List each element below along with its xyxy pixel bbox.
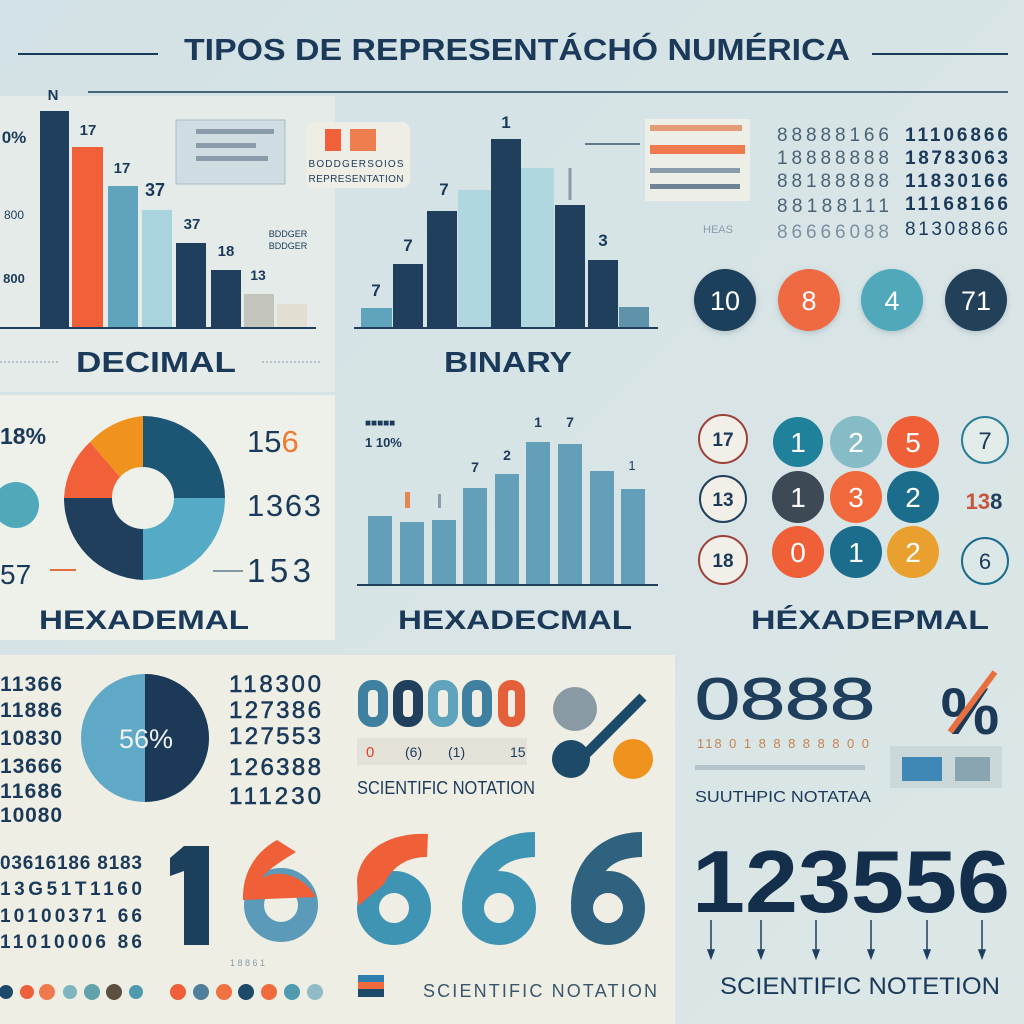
number circles: top right: 10 — [710, 286, 740, 316]
callout: decimal representation: BODDGERSOIOS — [308, 159, 404, 170]
number table: top right: 18783063 — [905, 148, 1008, 169]
bar chart: decimal: 800 — [3, 271, 25, 286]
number table: lower left: 1 8 8 6 1 — [230, 958, 265, 968]
number table: top right: 88188111 — [777, 196, 889, 217]
donut side numbers: 1363 — [247, 488, 321, 523]
number table: top right — [703, 125, 1008, 243]
bar chart: hexadecimal: ■■■■■ — [365, 418, 395, 429]
large number 1 — [170, 846, 209, 945]
outlined number circles: left column: 18 — [712, 551, 734, 572]
bar chart: binary: 7 — [403, 236, 413, 255]
number circle grid: 2 — [905, 482, 921, 513]
label: scientific notation bottom right: SCIENTIFIC NOTETION — [720, 973, 1000, 1000]
number table: top right: 11106866 — [905, 125, 1008, 146]
outlined number circles: right column: 6 — [979, 549, 991, 574]
large number 6 with orange top — [243, 840, 316, 932]
bar chart: binary: 7 — [439, 180, 449, 199]
panel: decimal background — [0, 96, 335, 392]
number circle grid: 2 — [905, 537, 921, 568]
number list: center: 118300 — [229, 671, 321, 698]
title: TIPOS DE REPRESENTÁCHÓ NUMÉRICA — [184, 31, 850, 67]
label: scientific notation right: SUUTHPIC NOTATAA — [695, 789, 871, 806]
number list: center: 127386 — [229, 697, 321, 724]
heading: hexadecimal right: HÉXADEPMAL — [751, 604, 989, 635]
number circles: top right: 71 — [961, 286, 991, 316]
number list: bottom left: 11686 — [0, 780, 62, 803]
colored digit blocks: 15 — [510, 744, 526, 760]
bar chart: decimal: 17 — [114, 160, 130, 177]
bar chart: decimal — [0, 87, 322, 362]
number list: bottom left: 13666 — [0, 755, 62, 778]
donut side numbers: 153 — [247, 552, 311, 589]
outlined number circles: left column: 17 — [712, 430, 734, 451]
outlined number circles: left column — [699, 415, 747, 584]
donut side numbers: 18% — [0, 423, 46, 449]
large number 6 — [462, 832, 535, 934]
number table: lower left — [0, 853, 265, 968]
donut chart — [64, 416, 225, 580]
number table: top right: 86666088 — [777, 222, 889, 243]
big number 123556: 123556 — [692, 832, 1010, 931]
colored digit blocks: 0 — [366, 744, 374, 761]
number table: lower left: 11010006 86 — [0, 932, 142, 953]
colored digit blocks: (1) — [448, 744, 465, 760]
number list: bottom left — [0, 673, 62, 827]
heading: hexadecimal left: HEXADEMAL — [39, 605, 249, 635]
bar chart: hexadecimal — [357, 414, 658, 585]
number table: top right: 88888166 — [777, 125, 889, 146]
number row: 0888: 0888 — [695, 667, 875, 732]
number circle grid: 5 — [905, 427, 921, 458]
donut side numbers: 156 — [247, 424, 299, 459]
number circle grid — [772, 416, 939, 578]
number table: top right: 81308866 — [905, 219, 1008, 240]
bar chart: decimal: BDDGER — [269, 229, 308, 239]
colored digit blocks — [357, 685, 527, 765]
callout: decimal representation: REPRESENTATION — [308, 174, 404, 185]
outlined number circles: right column: 7 — [978, 428, 992, 455]
large number 6 dark — [571, 832, 642, 934]
pie chart: 56%: 56% — [119, 724, 173, 754]
bar chart: binary: 3 — [598, 231, 608, 250]
number circle grid: 1 — [790, 482, 806, 513]
tiny figures row — [695, 736, 1002, 788]
bar chart: hexadecimal: 2 — [503, 447, 511, 463]
outlined number circles: left column: 13 — [712, 490, 734, 511]
bar chart: decimal: N — [48, 87, 58, 104]
heading: binary: BINARY — [444, 347, 572, 379]
outlined number circles: right column: 138 — [966, 489, 1002, 514]
number table: lower left: 13G51T1160 — [0, 879, 142, 900]
number list: center: 126388 — [229, 754, 321, 781]
number list: bottom left: 11886 — [0, 699, 62, 722]
pie chart: 56% — [81, 674, 209, 802]
bar chart: hexadecimal: 1 10% — [365, 435, 402, 450]
callout: binary card — [645, 119, 750, 201]
bar chart: decimal: 800 — [4, 208, 24, 222]
number table: top right: 11168166 — [905, 194, 1008, 215]
bar chart: hexadecimal: 1 — [628, 458, 636, 473]
number table: top right: 18888888 — [777, 148, 889, 169]
number list: bottom left: 11366 — [0, 673, 62, 696]
number circles: top right: 4 — [884, 286, 900, 316]
tiny figures row: 118 0 1 8 8 8 8 8 8 0 0 — [697, 736, 869, 751]
number list: center: 111230 — [229, 783, 321, 810]
colored digit blocks: (6) — [405, 744, 422, 760]
bar chart: binary — [354, 113, 658, 328]
number list: bottom left: 10830 — [0, 727, 62, 750]
number table: lower left: 10100371 66 — [0, 906, 142, 927]
label: scientific notation center: SCIENTIFIC NOTATION — [357, 778, 535, 798]
number table: top right: 11830166 — [905, 171, 1008, 192]
donut side numbers — [0, 423, 321, 590]
number circle grid: 2 — [848, 427, 864, 458]
bar chart: decimal: BDDGER — [269, 241, 308, 251]
number circle grid: 1 — [848, 537, 864, 568]
number list: center — [229, 671, 321, 810]
number circle grid: 1 — [790, 427, 806, 458]
heading: decimal: DECIMAL — [76, 347, 236, 379]
bar chart: decimal: 13 — [250, 267, 266, 283]
outlined number circles: right column — [962, 417, 1008, 584]
number list: center: 127553 — [229, 723, 321, 750]
panel: hexadecimal donut background — [0, 395, 335, 640]
callout: decimal representation — [306, 122, 410, 188]
heading: hexadecimal center: HEXADECMAL — [398, 605, 632, 635]
bar chart: hexadecimal: 7 — [471, 459, 479, 475]
percent symbol: % — [941, 674, 999, 748]
number table: top right: HEAS — [703, 224, 733, 236]
bar chart: decimal: 37 — [145, 180, 165, 200]
large number 6 center — [357, 834, 428, 934]
bar chart: decimal: 18 — [218, 243, 234, 260]
number circle grid: 3 — [848, 482, 864, 513]
dots row left — [0, 984, 323, 1000]
number circle grid: 0 — [790, 537, 806, 568]
number table: top right: 88188888 — [777, 171, 889, 192]
bar chart: binary: 7 — [371, 281, 381, 300]
bar chart: decimal: 37 — [184, 216, 200, 233]
bar chart: hexadecimal: 7 — [566, 414, 574, 430]
number table: lower left: 03616186 8183 — [0, 853, 142, 874]
number list: bottom left: 10080 — [0, 804, 62, 827]
bar chart: binary: 1 — [501, 113, 511, 132]
bar chart: decimal: 0% — [2, 128, 26, 147]
number circles: top right — [694, 269, 1007, 331]
legend card: decimal — [176, 120, 285, 184]
percent symbol large — [552, 687, 653, 779]
bar chart: decimal: 17 — [80, 122, 96, 139]
number circles: top right: 8 — [801, 286, 817, 316]
donut side numbers: 57 — [0, 559, 31, 590]
panel: scientific notation background — [0, 655, 675, 1024]
label: scientific notation bottom center: SCIENTIFIC NOTATION — [423, 981, 657, 1001]
arrows under big number — [708, 920, 985, 958]
label: scientific notation bottom center — [358, 975, 657, 1001]
bar chart: hexadecimal: 1 — [534, 414, 542, 430]
